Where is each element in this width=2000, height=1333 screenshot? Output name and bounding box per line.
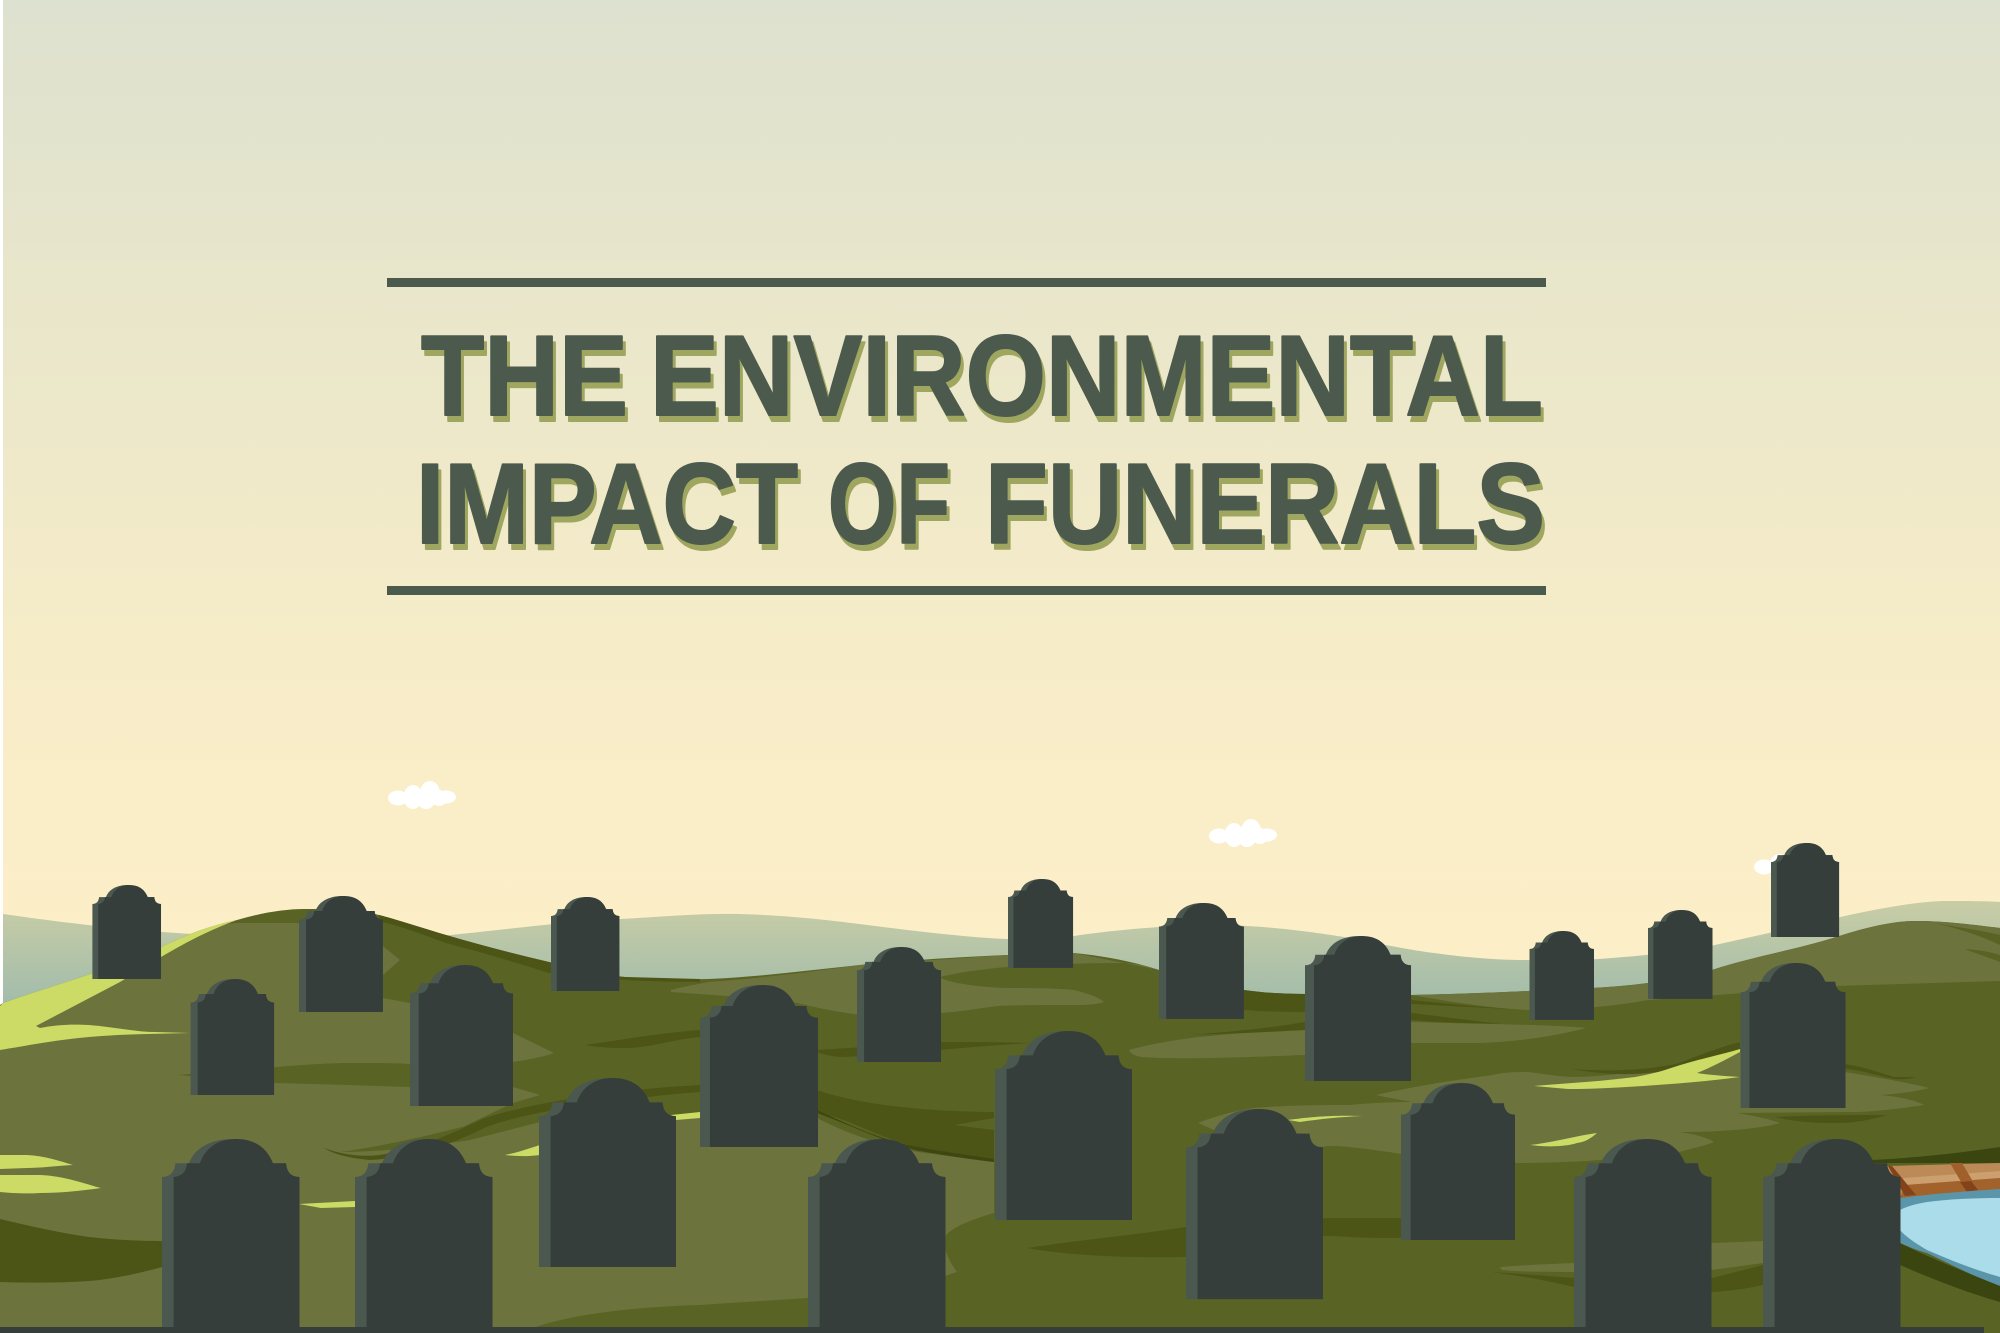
stream shadow <box>340 1075 700 1152</box>
dark patch under tombs <box>1027 1218 1401 1257</box>
headstone back row 7 <box>1648 910 1712 999</box>
streak below patch <box>1775 1115 1887 1123</box>
headstone bottom 4 <box>1574 1139 1712 1327</box>
lime stream <box>505 1112 700 1156</box>
headstone middle row 1 <box>191 979 274 1095</box>
title main text: ENVIRONMENTAL <box>650 313 1543 440</box>
cloud centre <box>1209 819 1277 847</box>
title main text <box>416 313 1545 568</box>
dark band between middle headstones <box>817 1090 994 1162</box>
title rule top <box>387 278 1546 287</box>
light blob centre <box>671 953 1159 1015</box>
headstone back row 3 <box>551 897 619 991</box>
bridge strap right lower <box>1960 1181 1978 1192</box>
grass sliver in band <box>954 1118 994 1130</box>
title main text: OF <box>828 441 950 568</box>
pond rim <box>1900 1189 2000 1286</box>
headstone middle row 2 <box>410 965 513 1106</box>
stream dark streak <box>324 1085 700 1160</box>
headstone bottom 3 <box>808 1139 946 1327</box>
title rule bottom <box>387 586 1546 595</box>
darkest streak in band <box>817 1110 994 1162</box>
headstone back row 6 <box>1530 931 1594 1020</box>
lime lower-left 1 <box>0 1155 73 1169</box>
dark streak right-centre <box>1190 1013 1501 1035</box>
title main text: FUNERALS <box>985 441 1545 568</box>
title shadow: ENVIRONMENTAL <box>653 319 1546 446</box>
cloud right <box>1754 850 1822 878</box>
dark bank upper <box>1872 1147 2000 1163</box>
headstone front row 2 <box>995 1031 1132 1220</box>
bridge planks <box>1887 1163 2000 1198</box>
headstone back row 5 <box>1159 903 1244 1019</box>
big light patch right <box>1198 1049 1929 1163</box>
dark bank lower <box>1900 1243 2000 1302</box>
graveyard landscape <box>0 909 2000 1333</box>
headstone middle row 4 <box>700 985 818 1147</box>
shaded band left <box>179 1062 513 1087</box>
light blob right-centre <box>1129 1022 1586 1058</box>
headstone middle row 6 <box>1741 963 1846 1108</box>
title shadow: OF <box>831 447 953 574</box>
headstone back row 1 <box>92 885 161 979</box>
light hill right <box>1412 921 2000 1010</box>
bridge lower band <box>1900 1178 2000 1198</box>
headstone middle row 5 <box>1305 936 1411 1081</box>
lime lower-left 2 <box>0 1175 101 1193</box>
pond and footbridge <box>1872 1147 2000 1302</box>
title main text: THE <box>421 313 628 440</box>
streak right of tomb <box>1845 1064 1916 1079</box>
dark streak bottom right <box>1492 1265 1763 1292</box>
lime centre-right <box>1534 1049 1740 1089</box>
grass base <box>0 909 2000 1333</box>
headstone back row 8 <box>1771 843 1839 937</box>
hill rim <box>379 915 700 982</box>
upper dark streak <box>1572 1042 1740 1074</box>
thin dark band centre <box>817 1042 1029 1057</box>
light patch bottom right <box>1500 1241 1763 1272</box>
distant hills <box>3 901 2000 1060</box>
cloud left <box>388 781 456 809</box>
pond water <box>1900 1198 2000 1277</box>
lime mid-left <box>299 1201 355 1208</box>
title shadow: FUNERALS <box>988 447 1548 574</box>
lime grass left <box>0 920 237 1050</box>
ground strip <box>0 1327 1984 1333</box>
title shadow: THE <box>424 319 631 446</box>
headstone back row 4 <box>1008 879 1073 968</box>
title <box>416 313 1548 574</box>
title main text: IMPACT <box>416 441 798 568</box>
lime small 1 <box>1288 1116 1362 1122</box>
headstone back row 2 <box>299 896 383 1012</box>
headstone middle row 3 <box>857 947 941 1062</box>
headstone bottom 5 <box>1763 1139 1900 1327</box>
title shadow <box>419 319 1548 574</box>
light grass left <box>0 923 994 1327</box>
hill streak right <box>1929 922 2000 962</box>
bridge strap left <box>1888 1166 1916 1196</box>
headstone bottom 2 <box>355 1139 492 1327</box>
lower-left dark patch <box>0 1219 170 1283</box>
rim right <box>1159 970 1528 1012</box>
bridge strap right <box>1950 1163 1978 1192</box>
headstone front row 1 <box>539 1078 676 1267</box>
lime small 2 <box>1530 1133 1597 1146</box>
headstone bottom 1 <box>162 1139 300 1327</box>
headstone front row 4 <box>1401 1083 1515 1240</box>
headstones <box>92 843 1900 1327</box>
sky background <box>3 0 2000 1010</box>
bridge light stripe <box>1903 1171 2000 1185</box>
title shadow: IMPACT <box>419 447 801 574</box>
dark sliver <box>585 1030 700 1048</box>
headstone front row 3 <box>1186 1109 1323 1299</box>
